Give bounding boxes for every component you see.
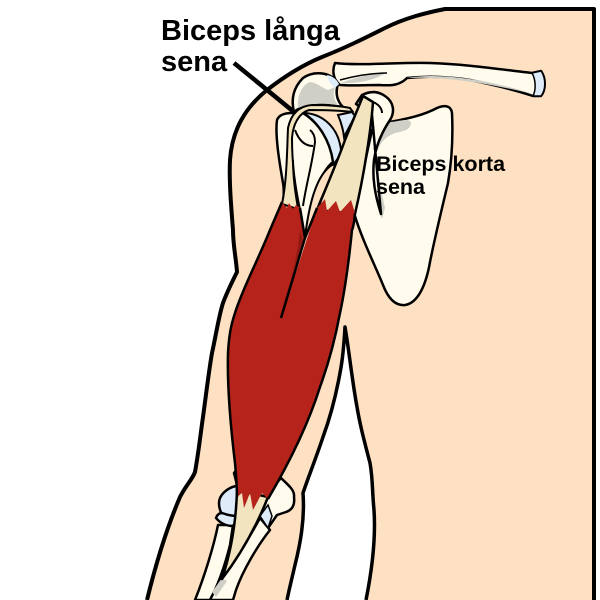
clavicle [333, 63, 545, 96]
biceps long head tendon [282, 105, 353, 232]
arm and shoulder skin [147, 9, 594, 600]
humeral head and cartilage [303, 112, 355, 166]
label: long head: sena [161, 46, 228, 78]
scapula [354, 92, 452, 305]
humerus [276, 113, 340, 238]
label: long head: Biceps långa [161, 15, 340, 47]
biceps tendons: short head and distal [222, 96, 382, 579]
acromion [293, 73, 343, 112]
forearm bones [195, 466, 294, 600]
label: short head: Biceps korta [376, 152, 505, 176]
leader line [234, 63, 294, 112]
biceps muscle [228, 199, 355, 510]
label: short head: sena [376, 175, 426, 199]
